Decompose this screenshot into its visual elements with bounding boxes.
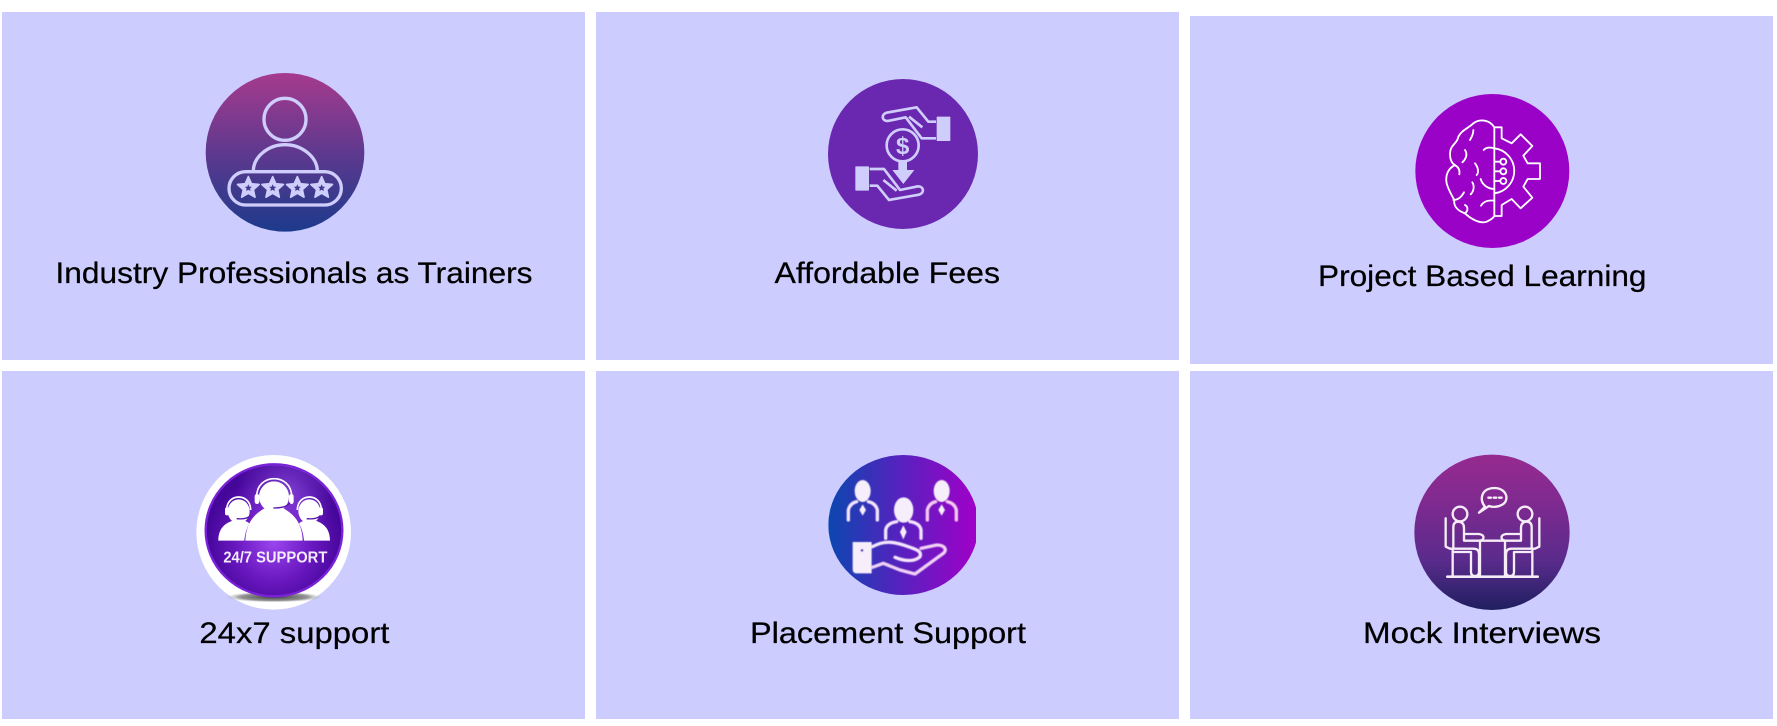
panel: Affordable Fees: [596, 12, 1179, 360]
icon: 24/7 support badge: [196, 455, 351, 610]
icon: hands exchanging money: [828, 79, 978, 229]
label: Affordable Fees: Affordable Fees: [774, 257, 1000, 290]
icon: interview at a table: [1414, 455, 1570, 610]
label: Project Based Learning: Project Based Learning: [1318, 260, 1646, 293]
icon: brain and gear: [1415, 94, 1569, 248]
label: Placement Support: Placement Support: [750, 617, 1027, 650]
label: Industry Professionals as Trainers: Industry Professionals as Trainers: [56, 257, 532, 290]
panel: 24x7 support: [2, 371, 585, 719]
icon: people on a hand: [828, 455, 978, 595]
panel: Mock Interviews: [1190, 371, 1773, 719]
label: 24x7 support: 24x7 support: [199, 617, 390, 650]
badge text: 24/7 SUPPORT: [223, 550, 328, 567]
label: Mock Interviews: Mock Interviews: [1363, 617, 1601, 650]
panel: Placement Support: [596, 371, 1179, 719]
panel: Industry Professionals as Trainers: [2, 12, 585, 360]
icon: hands exchanging money: $: [896, 133, 909, 160]
icon: trainer with star rating: [206, 73, 364, 232]
panel: Project Based Learning: [1190, 16, 1773, 364]
